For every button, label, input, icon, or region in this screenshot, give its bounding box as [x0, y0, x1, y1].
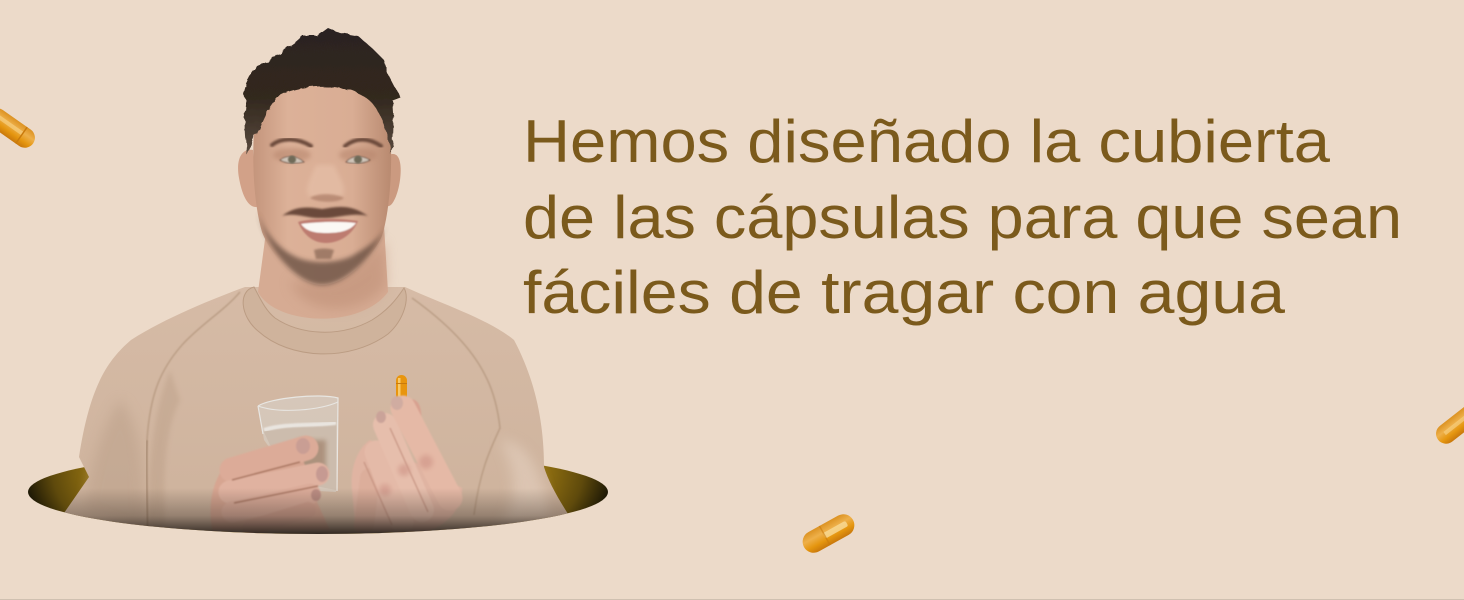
man holding a capsule and a glass of water: [40, 28, 580, 540]
sweater: [62, 287, 568, 540]
capsule: bottom centre: [799, 510, 858, 557]
heading: fáciles de tragar con agua: [523, 259, 1286, 326]
heading: [523, 108, 1402, 326]
eyes and brows: [272, 139, 381, 164]
heading: Hemos diseñado la cubierta: [523, 108, 1331, 175]
capsule held between fingers: [396, 375, 407, 398]
shadow fading into the hole: [64, 492, 568, 534]
face: [253, 66, 391, 285]
eye socket shading: [273, 148, 377, 162]
ears: [238, 150, 257, 207]
smile: [298, 219, 358, 243]
glass of water: [258, 396, 338, 492]
right hand holding capsule: [352, 396, 462, 532]
neck: [258, 225, 388, 319]
nose: [307, 165, 344, 202]
hair: [243, 28, 400, 155]
hole ellipse: [28, 450, 608, 534]
capsule: right edge: [1432, 396, 1464, 448]
capsule: top left: [0, 104, 39, 152]
collar: [243, 287, 406, 354]
beard: [258, 207, 386, 285]
heading: de las cápsulas para que sean: [523, 184, 1402, 251]
left hand holding glass: [210, 438, 330, 530]
